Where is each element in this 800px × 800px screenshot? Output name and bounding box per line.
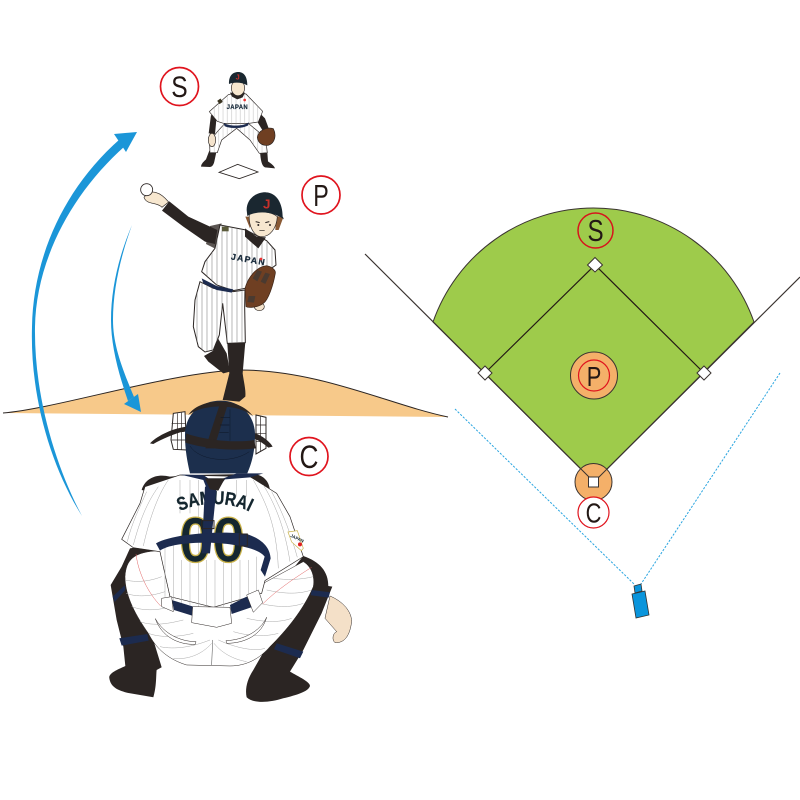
pitcher lower body [193,223,276,402]
shoulder pads [142,474,270,500]
base paths [485,265,704,373]
left leg and shoe [109,543,162,697]
field diagram [365,208,800,529]
helmet [185,401,255,473]
arms [209,115,217,134]
label P [302,176,340,214]
face [249,212,277,237]
collar and face [230,93,245,99]
back pockets [155,617,267,644]
field label S [578,213,613,248]
ball [141,184,153,196]
neck collar [245,228,266,248]
sleeve [206,223,222,249]
third base [478,366,492,380]
throwing arm [162,201,217,244]
hair [245,216,283,230]
field label S: S [587,213,604,248]
belt loops and waistband [162,590,263,627]
belt [172,597,253,616]
jersey [209,93,263,123]
pants [193,282,245,352]
icon: camera [632,584,649,618]
second base [588,258,602,272]
pitcher circle [570,352,618,399]
label S [160,68,198,106]
belt [224,123,249,128]
glove hand [254,303,264,311]
label P: P [313,178,329,213]
camera sightlines [455,373,780,584]
shoes [201,151,217,167]
first base [697,366,711,380]
shortstop figure [201,72,275,179]
pants [125,551,314,666]
pitcher upper body: J [263,196,270,211]
jersey [202,225,276,291]
jersey number: 00 [179,504,245,576]
field label C: C [586,498,601,529]
base diamond [219,164,258,179]
pitcher circle: P [587,361,601,393]
mound [3,370,448,417]
foul lines [365,254,800,482]
legs [209,123,267,153]
catcher: JAPAN [290,533,305,544]
raised foot [204,336,230,373]
jersey [122,475,303,607]
bare hand [208,133,216,147]
mask cage [171,412,266,454]
sleeve patch [288,531,303,551]
shortstop figure: J [236,72,240,81]
catcher [109,400,352,702]
hand [144,192,169,207]
jersey lettering: JAPAN [227,105,248,111]
belt [202,278,233,293]
catcher: SAMURAI [176,491,254,512]
cap [247,192,284,219]
label C [290,438,328,476]
planted leg and shoe [223,342,245,402]
cap [229,72,247,85]
right leg and shoe [246,556,332,702]
label S: S [171,70,188,104]
jersey name [180,504,251,512]
arrow: downward pitch path [111,225,141,412]
shoulder yoke [181,473,263,490]
pitcher upper body [141,184,284,248]
red piping [136,554,312,606]
outfield wedge [433,208,754,482]
jersey lettering: JAPAN [230,251,267,267]
shin straps [113,585,330,658]
field label C [578,497,609,529]
label C: C [300,441,318,476]
right forearm [325,596,352,643]
mask wings [150,427,273,448]
harness straps [202,487,217,553]
glove [257,128,275,145]
glove [245,266,275,307]
pants stripes [125,577,313,662]
catcher circle and home plate [575,464,612,500]
arrow: upward ball path [32,132,137,516]
